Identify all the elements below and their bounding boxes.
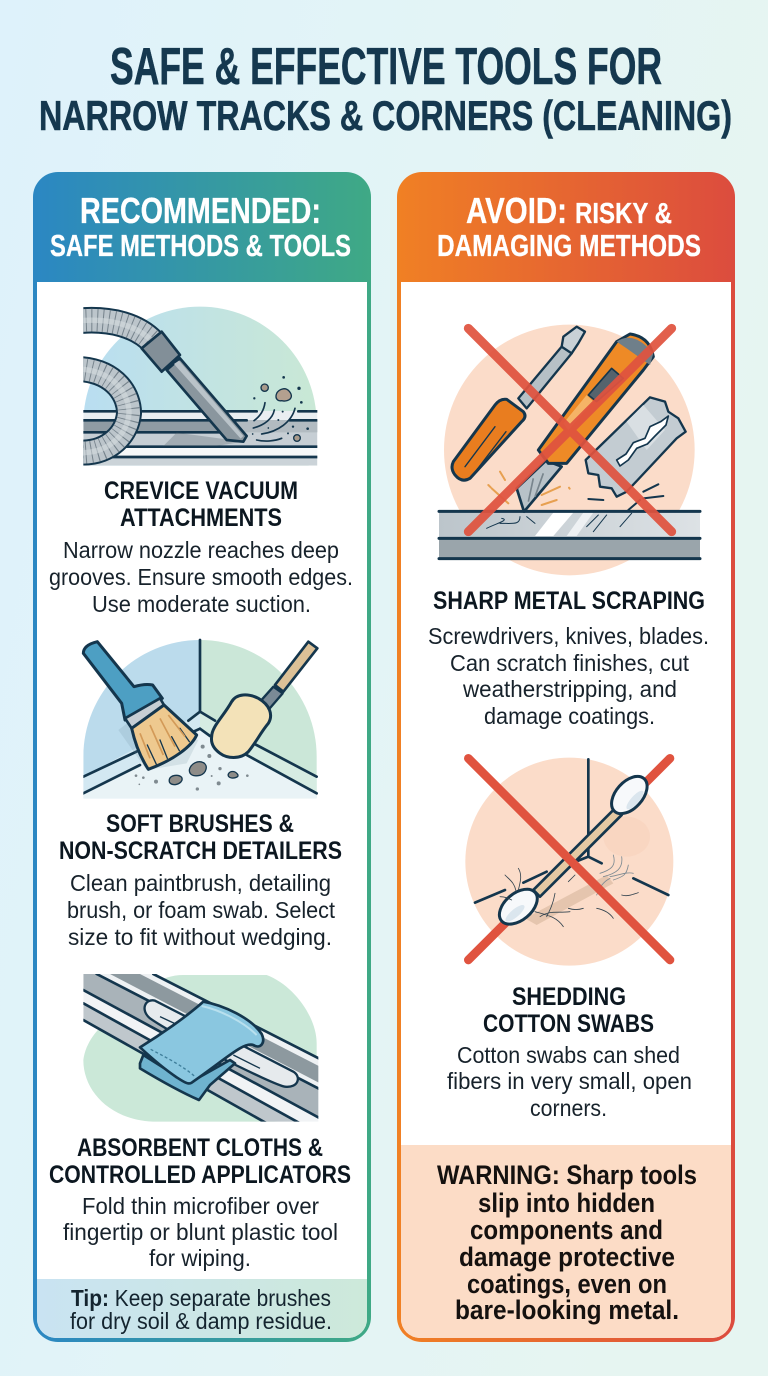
icon: crevice vacuum attachment bbox=[83, 306, 318, 466]
text block: sharp metal scraping: damage coatings. bbox=[484, 703, 655, 729]
text block: soft brushes: size to fit without wedging. bbox=[68, 924, 332, 950]
text block: crevice vacuum attachments: ATTACHMENTS bbox=[120, 504, 282, 532]
text block: crevice vacuum attachments: CREVICE VACUUM bbox=[104, 477, 298, 505]
debris bbox=[135, 745, 249, 791]
text block: sharp metal scraping: Can scratch finishes, cut bbox=[450, 650, 689, 676]
red x bbox=[468, 758, 670, 960]
razor blade bbox=[586, 397, 686, 497]
heading: avoid: DAMAGING METHODS bbox=[437, 228, 701, 263]
text block: crevice vacuum attachments bbox=[49, 477, 353, 617]
text block: soft brushes: SOFT BRUSHES & bbox=[106, 810, 294, 838]
text block: shedding cotton swabs: Cotton swabs can shed bbox=[457, 1042, 680, 1068]
text block: soft brushes: brush, or foam swab. Select bbox=[67, 897, 335, 923]
foam swab bbox=[275, 642, 317, 692]
heading: recommended: SAFE METHODS & TOOLS bbox=[50, 228, 351, 263]
heading: avoid bbox=[437, 190, 701, 263]
icon: cotton swab crossed out bbox=[465, 758, 673, 966]
lower hose bbox=[80, 320, 153, 453]
panel: avoid bbox=[397, 172, 735, 1342]
text block: absorbent cloths: for wiping. bbox=[149, 1245, 251, 1271]
red x bbox=[468, 758, 670, 960]
callout: tip: for dry soil & damp residue. bbox=[70, 1308, 332, 1334]
text block: soft brushes bbox=[59, 810, 342, 950]
heading: recommended bbox=[50, 190, 351, 263]
text block: shedding cotton swabs: fibers in very small, open bbox=[447, 1068, 692, 1094]
text block: soft brushes: Clean paintbrush, detailing bbox=[70, 870, 331, 896]
fibers bbox=[500, 855, 638, 927]
text block: absorbent cloths: CONTROLLED APPLICATORS bbox=[49, 1161, 351, 1189]
callout: warning: components and bbox=[470, 1215, 663, 1245]
text block: sharp metal scraping bbox=[428, 587, 709, 729]
text block: sharp metal scraping: SHARP METAL SCRAPING bbox=[433, 587, 705, 615]
heading: avoid: AVOID: bbox=[466, 190, 567, 231]
metal rail bbox=[439, 511, 700, 538]
callout: warning: coatings, even on bbox=[467, 1269, 667, 1299]
text block: absorbent cloths: ABSORBENT CLOTHS & bbox=[77, 1134, 323, 1162]
callout: warning: bare-looking metal. bbox=[455, 1295, 679, 1325]
cloth bbox=[140, 1055, 235, 1100]
text block: soft brushes: NON-SCRATCH DETAILERS bbox=[59, 837, 342, 865]
text block: sharp metal scraping: weatherstripping, and bbox=[462, 676, 677, 702]
callout: tip: Tip: Keep separate brushes bbox=[71, 1285, 331, 1311]
text block: crevice vacuum attachments: Narrow nozzle reaches deep bbox=[63, 537, 339, 563]
text block: absorbent cloths: fingertip or blunt plastic tool bbox=[63, 1219, 338, 1245]
red x bbox=[468, 328, 672, 532]
text block: absorbent cloths bbox=[49, 1134, 351, 1271]
text block: shedding cotton swabs: corners. bbox=[530, 1095, 607, 1121]
title bbox=[39, 38, 732, 139]
heading: avoid: RISKY & bbox=[575, 198, 672, 230]
utility knife bbox=[517, 334, 653, 512]
heading: recommended: RECOMMENDED: bbox=[80, 190, 321, 231]
sparks bbox=[488, 472, 663, 510]
callout: warning bbox=[401, 1145, 731, 1338]
callout: tip bbox=[37, 1279, 367, 1338]
callout: warning: WARNING: Sharp tools bbox=[437, 1160, 697, 1190]
screwdriver bbox=[452, 327, 585, 480]
text block: crevice vacuum attachments: Use moderate suction. bbox=[92, 591, 311, 617]
panel: recommended bbox=[33, 172, 371, 1342]
icon: sharp metal tools crossed out bbox=[439, 325, 700, 575]
callout: warning: damage protective bbox=[459, 1242, 675, 1272]
text block: sharp metal scraping: Screwdrivers, knives, blades. bbox=[428, 623, 709, 649]
callout: warning: slip into hidden bbox=[478, 1188, 655, 1218]
swab bbox=[493, 770, 654, 931]
text block: crevice vacuum attachments: grooves. Ensure smooth edges. bbox=[49, 564, 353, 590]
plastic tool bbox=[145, 1000, 298, 1087]
paintbrush bbox=[83, 642, 162, 720]
text block: absorbent cloths: Fold thin microfiber over bbox=[82, 1193, 319, 1219]
text block: shedding cotton swabs bbox=[447, 983, 692, 1121]
dust bbox=[252, 376, 309, 441]
text block: shedding cotton swabs: SHEDDING bbox=[512, 983, 626, 1011]
icon: soft brush and foam swab bbox=[83, 640, 317, 798]
text block: shedding cotton swabs: COTTON SWABS bbox=[483, 1010, 654, 1038]
icon: cloth over plastic tool bbox=[83, 974, 320, 1123]
